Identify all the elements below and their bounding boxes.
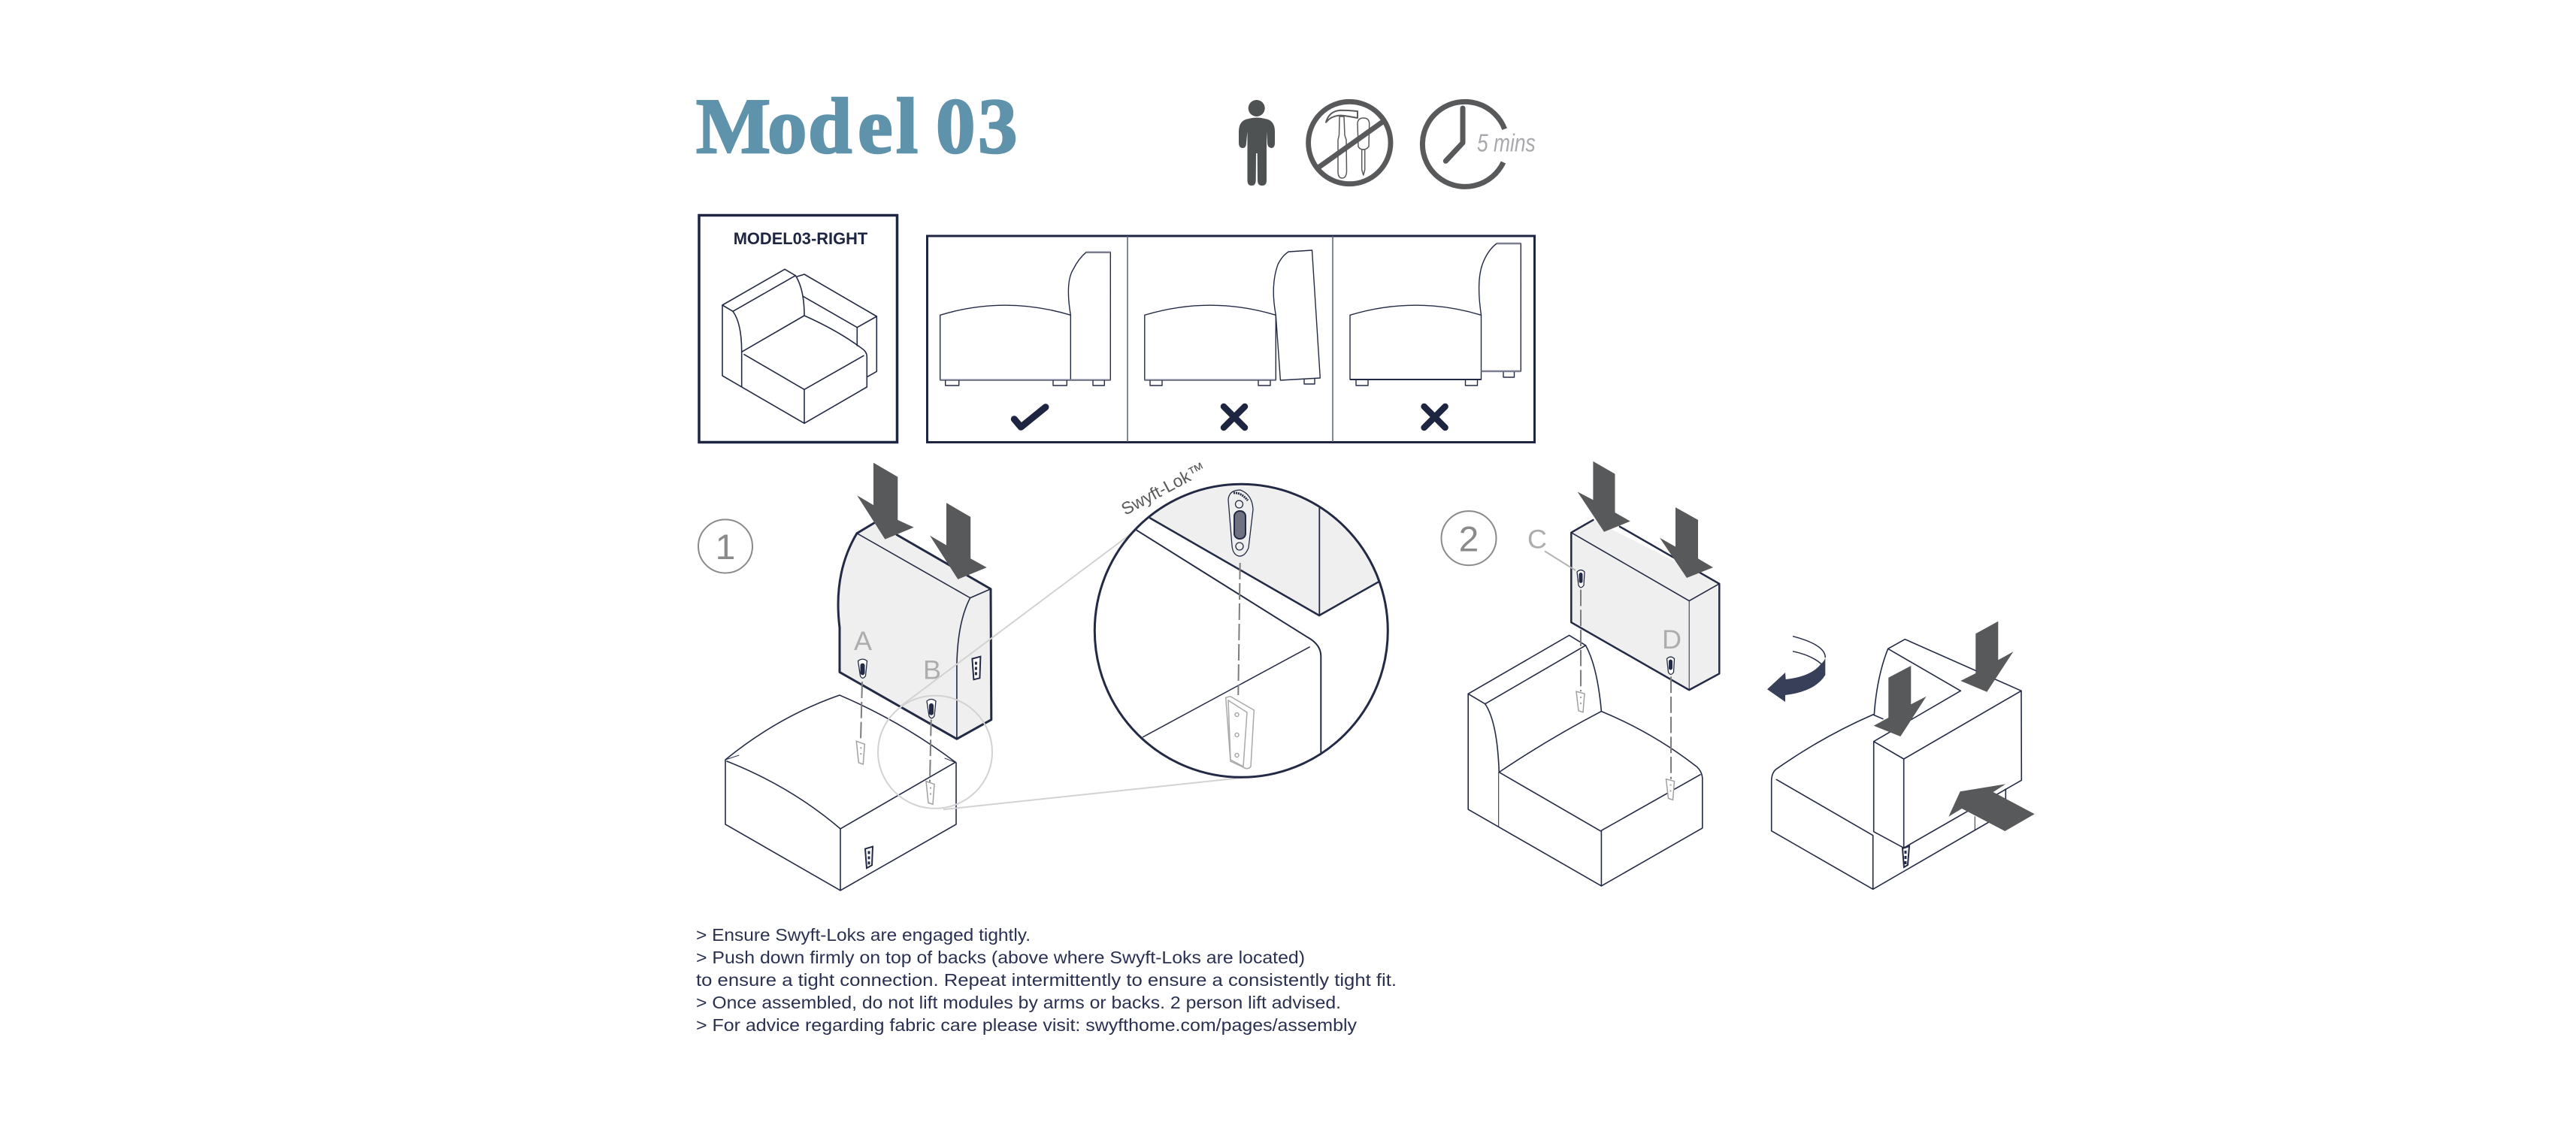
side view: back raised (1350, 243, 1521, 386)
push arrow (1578, 461, 1630, 532)
push arrow (857, 463, 914, 540)
instructions text (696, 925, 1397, 1035)
curved rotate arrow (1767, 636, 1825, 702)
Swyft-Lok A (858, 659, 867, 678)
push arrow (1660, 507, 1713, 578)
back block for chair (1571, 520, 1719, 690)
step 1 number: 1 (716, 528, 735, 567)
heading: model name: MODEL03-RIGHT (734, 229, 868, 248)
icon: check mark (1014, 407, 1046, 427)
icon: clock 5 mins: 5 mins (1477, 129, 1536, 157)
bracket on ottoman B (926, 782, 934, 804)
bracket on chair back (1576, 691, 1585, 712)
side view: back tilted (1145, 250, 1320, 386)
instructions text: > For advice regarding fabric care please visit: swyfthome.com/pages/assembly (696, 1015, 1358, 1035)
bracket on cushion side (972, 657, 980, 679)
side view: aligned correctly (940, 252, 1110, 386)
magnifier source circle and leader lines (878, 525, 1244, 809)
Swyft-Lok D (1667, 657, 1675, 674)
back cushion with Swyft-Loks (838, 523, 991, 739)
panel: model label box (699, 215, 898, 442)
push arrow (930, 503, 987, 579)
dashed guide A (861, 682, 862, 740)
label C with leader (1527, 525, 1576, 570)
label B: B (923, 655, 941, 685)
step 2 number: 2 (1459, 520, 1479, 559)
bracket on assembled module (1902, 846, 1909, 867)
Swyft-Lok receiver (1228, 490, 1253, 556)
instructions text: > Push down firmly on top of backs (above where Swyft-Loks are located) (696, 948, 1305, 967)
ottoman module (725, 695, 956, 890)
bracket on ottoman front (865, 847, 873, 868)
assembled module (1772, 640, 2021, 889)
title: Model 03 (696, 82, 1018, 170)
instructions text: > Once assembled, do not lift modules by arms or backs. 2 person lift advised. (696, 993, 1341, 1012)
instructions text: > Ensure Swyft-Loks are engaged tightly. (696, 925, 1031, 945)
instructions text: to ensure a tight connection. Repeat intermittently to ensure a consistently tight fit. (696, 970, 1397, 990)
push arrow (1960, 621, 2013, 692)
label C with leader: C (1527, 525, 1547, 554)
icon: cross mark (1424, 407, 1445, 428)
bracket on chair seat (1666, 779, 1675, 800)
icon: cross mark (1224, 407, 1245, 428)
dashed guide B (930, 720, 931, 782)
Swyft-Lok C (1577, 570, 1585, 588)
bracket on ottoman A (856, 741, 864, 764)
label A: A (854, 626, 872, 656)
icon: clock 5 mins (1422, 101, 1536, 186)
icon: no tools required (1309, 101, 1391, 184)
panel: correct and incorrect fit comparison (928, 236, 1535, 442)
push arrow (1874, 666, 1927, 736)
push arrow (1948, 784, 2035, 831)
Swyft-Lok B (927, 699, 936, 718)
step 2 illustration (1442, 461, 1719, 886)
dashed guide D (1670, 676, 1672, 779)
Swyft-Lok bracket (1226, 697, 1254, 769)
callout: Swyft-Lok label: Swyft-Lok™ (1118, 458, 1209, 519)
detail circle: Swyft-Lok engagement (1094, 484, 1388, 777)
step 2 number (1442, 511, 1496, 565)
label D: D (1662, 624, 1682, 655)
dashed guide (1238, 563, 1240, 695)
step 1 number (698, 519, 752, 573)
step 1 illustration (698, 463, 1244, 890)
dashed guide C (1580, 590, 1582, 691)
icon: one person (1239, 100, 1275, 186)
sofa isometric (722, 269, 876, 423)
chair module (1468, 635, 1703, 886)
